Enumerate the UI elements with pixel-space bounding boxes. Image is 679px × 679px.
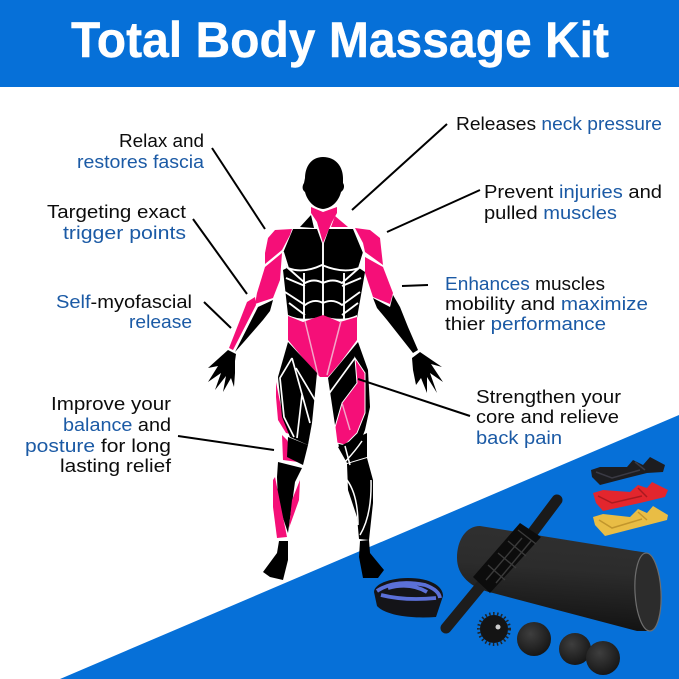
resistance bands [591,457,668,536]
callout: self-myofascial: Self-myofascial [56,292,192,312]
right arm [355,228,443,393]
callout: trigger points: trigger points [63,223,186,243]
callout: core: back pain [476,428,562,448]
trapezius [300,215,348,228]
title: Total Body Massage Kit [71,12,609,68]
foam roller [457,526,663,632]
callout: mobility: thier performance [445,314,606,334]
black band [591,457,665,485]
callout: core: core and relieve [476,407,619,427]
callout: self-myofascial: release [129,312,192,332]
callout: mobility: Enhances muscles [445,274,605,294]
yoga strap [374,578,443,618]
callout: mobility: mobility and maximize [445,294,648,314]
head [303,157,344,209]
callout: relax: restores fascia [77,152,205,172]
callout: trigger points: Targeting exact [47,202,186,222]
callout: injuries: Prevent injuries and [484,182,662,202]
massage stick [446,500,557,628]
callout: balance [25,394,172,476]
left arm [208,229,292,392]
callout: neck: Releases neck pressure [456,114,662,134]
callout: trigger points [47,202,186,243]
blue diagonal background [60,415,679,679]
red band [593,482,668,511]
callout: injuries: pulled muscles [484,203,617,223]
yellow band [593,506,668,536]
left leg [263,342,317,580]
body figure [208,157,443,580]
callout: balance: Improve your [51,394,171,414]
spiky ball [478,614,510,644]
right leg [328,342,384,578]
header banner [0,0,679,87]
callout: balance: lasting relief [60,456,172,476]
callout: balance: posture for long [25,436,171,456]
torso [283,229,365,320]
callout: injuries [484,182,662,223]
connector lines [178,124,480,450]
callout: mobility [445,274,648,334]
massage ball [517,622,551,656]
callout: relax: Relax and [119,131,204,151]
callout: balance: balance and [63,415,171,435]
callout: core: Strengthen your [476,387,621,407]
pelvis [288,315,357,377]
neck [311,207,337,243]
callout: self-myofascial [56,292,192,332]
peanut ball [559,633,620,675]
callout: relax [77,131,205,172]
callout: core [476,387,621,448]
